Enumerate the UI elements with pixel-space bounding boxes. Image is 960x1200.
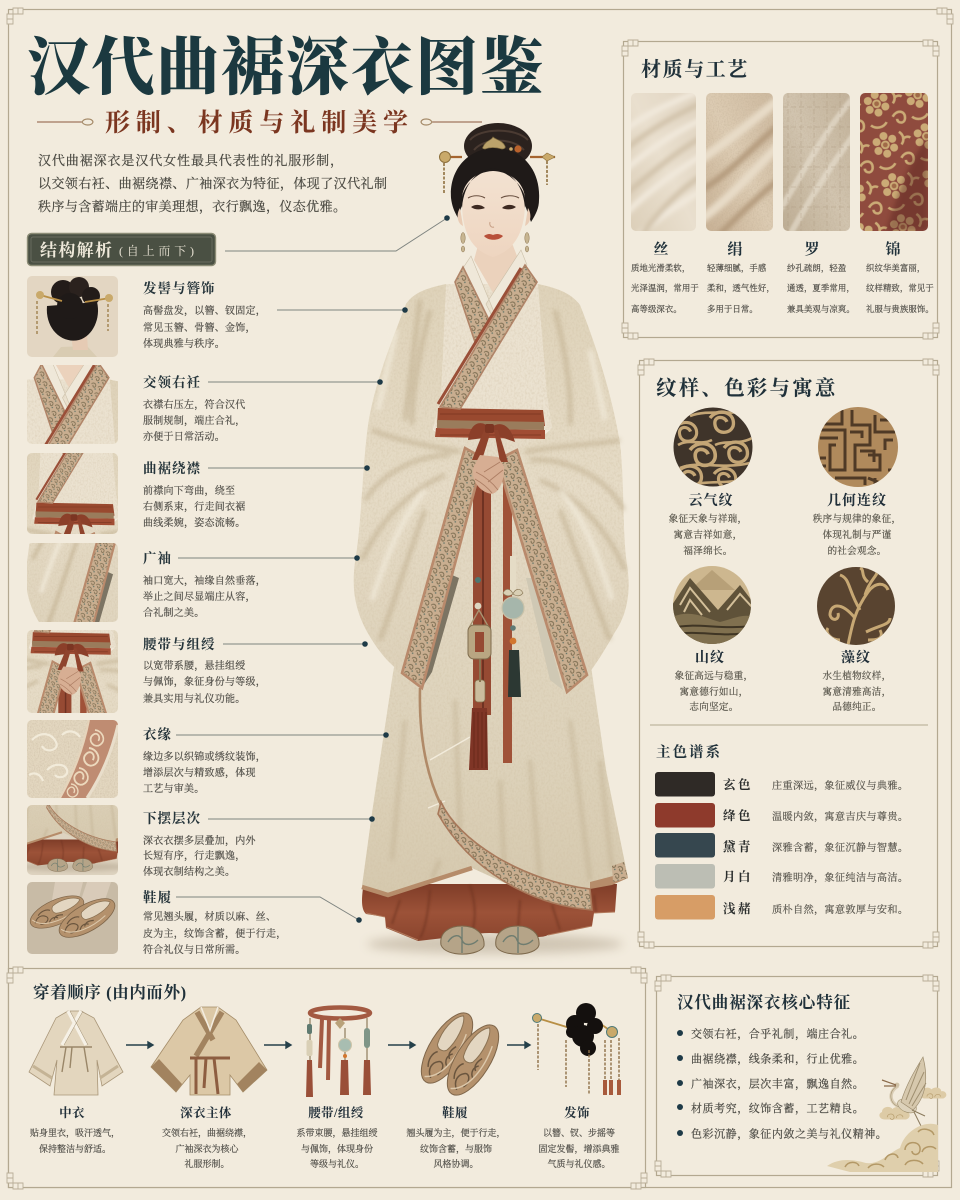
garment: inner robe — [29, 1011, 123, 1095]
motif labels: 象征高远与稳重， — [675, 670, 753, 682]
feature bullets: 曲裾绕襟，线条柔和，行止优雅。 — [691, 1052, 864, 1066]
material: juan — [707, 241, 775, 314]
part 6: robe edge thumbnail — [27, 720, 118, 798]
colour swatches: 浅赭 — [723, 901, 753, 916]
floor shadow — [367, 934, 623, 954]
panel: patterns and colours — [638, 359, 939, 948]
material: luo: 罗 — [804, 241, 820, 258]
label: edge: 增添层次与精致感，体现 — [143, 766, 256, 779]
motif labels: 几何连纹 — [827, 492, 887, 509]
colour swatches: 玄色 — [723, 777, 753, 792]
hanging sashes and pendants — [468, 485, 524, 770]
structure heading badge: (自上而下) — [119, 243, 194, 258]
torso of robe — [434, 284, 552, 430]
colour swatches: 深雅含蓄，象征沉静与智慧。 — [772, 841, 908, 854]
label: curved hem: 右侧系束，行走间衣裾 — [143, 500, 246, 513]
motif labels: 藻纹 — [841, 649, 871, 666]
intro paragraph: 秩序与含蓄端庄的审美理想，衣行飘逸，仪态优雅。 — [38, 199, 346, 215]
part labels and descriptions — [143, 280, 286, 956]
left wide sleeve — [354, 284, 483, 688]
label: sleeve: 合礼制之美。 — [143, 606, 204, 619]
dressing step labels: 翘头履为主，便于行走， — [406, 1127, 506, 1139]
dressing step labels: 保持整洁与舒适。 — [39, 1143, 111, 1154]
material: silk: 丝 — [653, 241, 669, 258]
dressing step labels: 腰带/组绶 — [308, 1105, 364, 1120]
embroidered shoes — [441, 926, 539, 954]
colour swatches: 庄重深远，象征威仪与典雅。 — [772, 779, 908, 792]
motif labels: 云气纹 — [688, 492, 734, 509]
dressing heading: 穿着顺序 (由内而外) — [33, 982, 187, 1002]
motif labels: 品德纯正。 — [832, 701, 882, 713]
label: shoes: 皮为主，纹饰含蓄，便于行走， — [143, 927, 286, 940]
subtitle with ornaments — [37, 109, 482, 137]
swatch: brocade jin — [860, 93, 928, 231]
motif: water plant — [817, 567, 895, 645]
label: collar: 衣襟右压左，符合汉代 — [143, 398, 246, 411]
panel: core features — [655, 975, 946, 1177]
garment: main robe — [151, 1007, 267, 1095]
label: sleeve: 袖口宽大，袖缘自然垂落， — [143, 574, 266, 587]
material: juan: 轻薄细腻，手感 — [707, 263, 767, 274]
label: curved hem: 曲裾绕襟 — [143, 460, 201, 476]
motif labels: 寓意清雅高洁， — [823, 686, 891, 698]
structure heading badge: 结构解析 — [40, 240, 112, 260]
label: edge: 衣缘 — [143, 727, 172, 742]
material: jin — [866, 240, 934, 314]
dressing step labels: 中衣 — [59, 1105, 85, 1120]
motif labels: 的社会观念。 — [827, 545, 887, 557]
motif labels: 寓意德行如山， — [680, 686, 748, 698]
intro paragraph — [38, 153, 387, 215]
part 5: belt thumbnail — [27, 630, 118, 713]
label: belt: 与佩饰，象征身份与等级， — [143, 675, 266, 688]
part 3: curved hem thumbnail — [27, 453, 118, 534]
leader lines with dots — [176, 215, 450, 923]
ears — [458, 208, 530, 226]
label: collar — [143, 374, 246, 443]
label: hair: 常见玉簪、骨簪、金饰， — [143, 321, 256, 334]
dressing step labels: 与佩饰，体现身份 — [301, 1143, 373, 1155]
colour swatches — [655, 772, 908, 920]
dressing step labels: 固定发髻，增添典雅 — [538, 1143, 620, 1155]
thumbnail rounded corner masks — [25, 274, 120, 956]
material: luo: 纱孔疏朗，轻盈 — [787, 263, 847, 274]
subtitle with ornaments: 形制、材质与礼制美学 — [105, 109, 408, 137]
dressing step labels: 贴身里衣，吸汗透气， — [30, 1127, 120, 1139]
colour swatches: 月白 — [723, 869, 753, 884]
feature bullets: 广袖深衣，层次丰富，飘逸自然。 — [691, 1076, 864, 1090]
panel: materials — [621, 40, 939, 339]
label: curved hem: 曲线柔婉，姿态流畅。 — [143, 516, 246, 529]
material: juan: 绢 — [727, 241, 743, 258]
part 2: collar thumbnail — [27, 365, 118, 444]
material: juan: 多用于日常。 — [707, 304, 758, 314]
colour swatches: 清雅明净，象征纯洁与高洁。 — [772, 871, 908, 884]
hair ornaments — [532, 1003, 621, 1095]
label: sleeve — [143, 550, 266, 619]
part 1: hair bun thumbnail — [27, 276, 118, 357]
label: collar: 服制规制，端庄合礼， — [143, 414, 246, 427]
motif: cloud — [674, 408, 752, 487]
feature bullets — [677, 1026, 887, 1140]
label: edge — [143, 727, 266, 795]
label: hair: 体现典雅与秩序。 — [143, 337, 225, 350]
label: collar: 亦便于日常活动。 — [143, 430, 225, 443]
label: hair: 高髻盘发，以簪、钗固定， — [143, 304, 266, 317]
label: sleeve: 广袖 — [143, 550, 172, 566]
label: collar: 交领右衽 — [143, 374, 201, 390]
part 8: shoes thumbnail — [27, 882, 118, 954]
feature bullets: 材质考究，纹饰含蓄，工艺精良。 — [691, 1101, 864, 1115]
motif labels: 体现礼制与严谨 — [823, 529, 892, 541]
dressing step labels: 纹饰含蓄，与服饰 — [420, 1143, 492, 1155]
gold hairpins — [440, 137, 555, 193]
dressing step labels: 系带束腰，悬挂组绶 — [296, 1127, 378, 1139]
material: silk: 光泽温润，常用于 — [631, 283, 699, 294]
clasped hands — [473, 455, 504, 494]
label: shoes: 鞋履 — [143, 889, 172, 905]
structure heading badge — [28, 234, 216, 266]
intro paragraph: 以交领右衽、曲裾绕襟、广袖深衣为特征，体现了汉代礼制 — [38, 176, 387, 192]
label: hair: 发髻与簪饰 — [143, 280, 216, 296]
material: jin: 礼服与贵族服饰。 — [866, 304, 934, 314]
earrings — [461, 232, 529, 252]
dressing step labels: 广袖深衣为核心 — [175, 1143, 239, 1154]
dressing step labels: 深衣主体 — [180, 1105, 232, 1120]
motif labels: 福泽绵长。 — [683, 545, 733, 557]
dressing step labels: 气质与礼仪感。 — [547, 1158, 611, 1169]
material: jin: 织纹华美富丽， — [866, 263, 925, 274]
material: silk — [631, 241, 699, 314]
arrow — [126, 1042, 153, 1048]
label: hair — [143, 280, 266, 350]
dressing step labels: 鞋履 — [442, 1105, 468, 1120]
label: curved hem — [143, 460, 246, 529]
red underskirt — [362, 884, 617, 941]
dressing step labels: 等级与礼仪。 — [310, 1158, 364, 1169]
part 4: wide sleeve thumbnail — [27, 543, 118, 622]
colour swatches: 绛色 — [723, 808, 753, 823]
colour palette heading: 主色谱系 — [656, 743, 722, 761]
motif: geometric — [818, 407, 900, 488]
label: sleeve: 举止之间尽显端庄从容， — [143, 590, 256, 603]
belt and pendants — [306, 1008, 371, 1097]
swatch corner masks — [629, 91, 930, 233]
outer skirt — [362, 436, 628, 910]
dressing step labels: 交领右衽，曲裾绕襟， — [162, 1127, 252, 1139]
patterns heading: 纹样、色彩与寓意 — [656, 376, 838, 400]
motif labels — [669, 492, 901, 713]
feature bullets: 色彩沉静，象征内敛之美与礼仪精神。 — [691, 1126, 887, 1140]
label: hem layers: 下摆层次 — [143, 810, 201, 826]
label: hem layers: 长短有序，行走飘逸， — [143, 849, 246, 862]
motif labels: 志向坚定。 — [689, 701, 739, 713]
arrow — [507, 1042, 530, 1048]
label: shoes: 常见翘头履，材质以麻、丝、 — [143, 910, 276, 923]
dressing step labels: 礼服形制。 — [184, 1158, 230, 1169]
motif labels: 象征天象与祥瑞， — [669, 513, 747, 525]
motif labels: 秩序与规律的象征， — [813, 513, 901, 525]
motif labels: 水生植物纹样， — [823, 670, 891, 682]
crossed collar — [438, 250, 537, 409]
pair of shoes — [411, 1005, 509, 1103]
dressing step labels: 风格协调。 — [433, 1158, 479, 1169]
full figure in Han quju shenyi — [354, 123, 629, 954]
material: silk: 质地光滑柔软， — [631, 263, 690, 274]
label: edge: 缘边多以织锦或绣纹装饰， — [143, 750, 266, 763]
material: silk: 高等级深衣。 — [631, 304, 682, 314]
label: curved hem: 前襟向下弯曲，绕至 — [143, 484, 235, 497]
label: belt — [143, 636, 266, 705]
dressing step labels: 以簪、钗、步摇等 — [543, 1127, 615, 1138]
right wide sleeve — [497, 284, 629, 692]
face — [461, 168, 526, 257]
material: jin: 锦 — [885, 240, 901, 258]
label: shoes: 符合礼仪与日常所需。 — [143, 943, 246, 956]
swatch: silk — [631, 93, 696, 231]
swatch: plain silk juan — [706, 93, 773, 231]
motif: mountains — [673, 566, 751, 644]
core features heading: 汉代曲裾深衣核心特征 — [677, 992, 851, 1012]
waist belt and bow — [435, 408, 545, 462]
label: belt: 以宽带系腰，悬挂组绶 — [143, 659, 246, 672]
label: belt: 腰带与组绶 — [143, 636, 216, 652]
materials heading: 材质与工艺 — [641, 58, 749, 81]
colour swatches: 质朴自然，寓意敦厚与安和。 — [772, 903, 908, 916]
intro paragraph: 汉代曲裾深衣是汉代女性最具代表性的礼服形制， — [38, 153, 343, 169]
title: 汉代曲裾深衣图鉴 — [27, 33, 543, 103]
dressing step labels: 发饰 — [564, 1105, 590, 1120]
material: jin: 纹样精致，常见于 — [866, 283, 934, 294]
hair back mass and bun — [451, 123, 539, 222]
part 7: layered hem thumbnail — [27, 805, 118, 875]
material: juan: 柔和，透气性好， — [707, 283, 775, 294]
feature bullets: 交领右衽，合乎礼制，端庄合礼。 — [691, 1026, 864, 1040]
material: luo — [787, 241, 855, 314]
label: belt: 兼具实用与礼仪功能。 — [143, 692, 246, 705]
material: luo: 兼具美观与凉爽。 — [787, 304, 855, 314]
label: shoes — [143, 889, 286, 956]
swatch: gauze luo — [783, 93, 850, 231]
dressing step labels — [30, 1105, 620, 1169]
label: hem layers — [143, 810, 256, 878]
label: hem layers: 体现衣制结构之美。 — [143, 865, 235, 878]
crane and clouds — [827, 1057, 946, 1172]
colour swatches: 黛青 — [723, 839, 753, 854]
label: hem layers: 深衣衣摆多层叠加，内外 — [143, 834, 256, 847]
colour swatches: 温暖内敛，寓意吉庆与尊贵。 — [772, 810, 908, 823]
label: edge: 工艺与审美。 — [143, 782, 204, 795]
arrow — [388, 1042, 415, 1048]
panel: dressing order — [7, 967, 647, 1189]
motif labels: 山纹 — [695, 650, 725, 666]
neck — [474, 238, 517, 296]
material: luo: 通透，夏季常用， — [787, 283, 855, 294]
motif labels: 寓意吉祥如意， — [674, 529, 742, 541]
arrow — [264, 1042, 291, 1048]
